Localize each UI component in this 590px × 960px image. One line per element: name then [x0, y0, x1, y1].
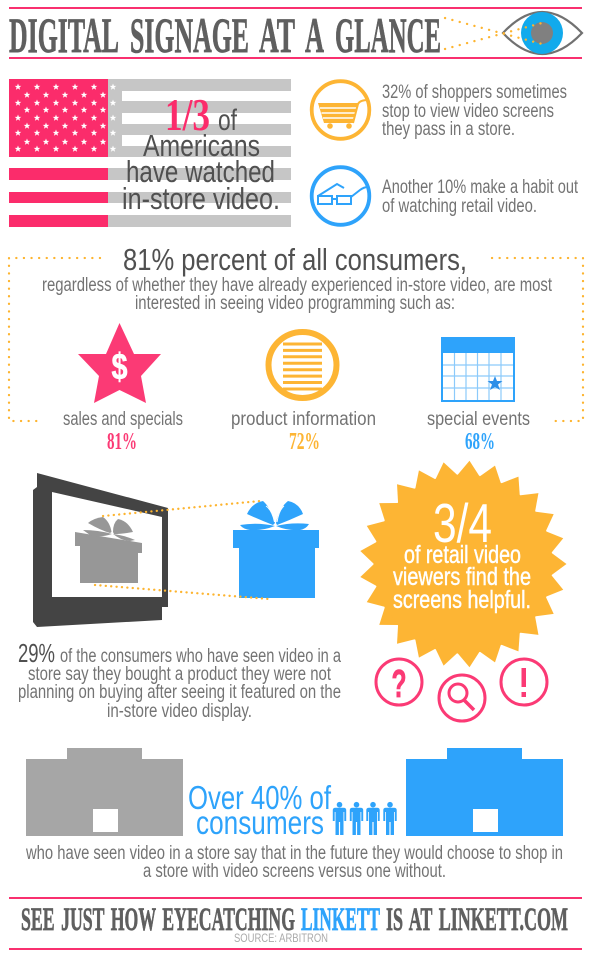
flag statistic text: Americans: [143, 128, 260, 163]
icon: shopping cart: [312, 81, 369, 139]
dotted projection lines: [95, 501, 269, 599]
badge text: [393, 541, 531, 614]
text: 29% of consumers: 29%: [18, 638, 55, 668]
text: future store choice: a store with video screens versus one without.: [143, 861, 446, 882]
label: special events 68%: special events: [427, 409, 530, 430]
panel: dotted frame programming interests: [9, 242, 583, 455]
icon: blue gift: [233, 501, 319, 598]
3/4 text: 3/4: [433, 492, 492, 554]
intro text: [42, 275, 553, 314]
icon: star with dollar sign: $: [112, 346, 128, 387]
tv screen: [52, 492, 162, 597]
label: sales and specials 81%: sales and specials: [63, 409, 183, 430]
badge text: screens helpful.: [393, 586, 531, 614]
footer rule top: [9, 897, 582, 899]
text: GLANCE: [335, 7, 441, 63]
text: 29% of consumers: [18, 638, 341, 722]
icon: four people: [333, 802, 397, 835]
heading: over 40% of consumers: consumers: [196, 804, 324, 841]
footer call to action: SEE JUST HOW EYECATCHING: [21, 902, 295, 938]
text: 32% of shoppers: [382, 82, 567, 140]
flag: [9, 79, 291, 227]
footer call to action: LINKETT: [301, 902, 380, 938]
icon: question mark circle: ?: [392, 663, 406, 706]
label: special events 68%: [427, 409, 530, 455]
text: another 10%: of watching retail video.: [382, 196, 537, 217]
icon: glasses: [312, 167, 369, 225]
flag statistic text: in-store video.: [122, 181, 280, 216]
text: future store choice: [25, 843, 563, 882]
header rule top: [9, 7, 582, 9]
footer rule bottom: [9, 948, 582, 950]
icon: star with dollar sign: [78, 323, 161, 403]
title: A: [305, 7, 324, 63]
text: 32% of shoppers: they pass in a store.: [382, 119, 515, 140]
badge: 3/4 starburst: [318, 435, 590, 710]
text: 29% of consumers: in-store video display.: [107, 701, 252, 722]
starburst: [318, 435, 590, 710]
badge text: of retail video: [404, 541, 521, 569]
flag statistic text: have watched: [126, 154, 275, 189]
label: special events 68%: 68%: [465, 429, 495, 455]
icon: calendar: [441, 337, 515, 402]
title: DIGITAL: [9, 7, 119, 63]
title: SIGNAGE: [130, 7, 249, 63]
icon: exclamation circle: [501, 659, 547, 705]
icon: gray gift: [75, 517, 142, 583]
heading: over 40% of consumers: Over 40% of: [188, 779, 332, 816]
flag statistic text: 1/3: [165, 89, 210, 140]
label: product information 72%: [231, 409, 376, 455]
icon: eye with dotted gaze: [445, 12, 582, 54]
intro text: interested in seeing video programming such as:: [135, 293, 455, 314]
icon: blue store: [406, 748, 563, 836]
dotted frame: [9, 258, 583, 421]
header rule bottom: [9, 57, 582, 59]
text: another 10%: [382, 177, 579, 217]
illustration: tv screen with gift: [33, 473, 319, 627]
heading: 81% of all consumers: 81% percent of all consumers,: [123, 242, 467, 277]
title: [9, 7, 441, 63]
label: product information 72%: product information: [231, 409, 376, 430]
badge text: viewers find the: [393, 563, 531, 591]
label: sales and specials 81%: [63, 409, 183, 455]
text: 29% of consumers: store say they bought a product they were not: [28, 664, 332, 685]
panel: habit stat with glasses: [312, 167, 579, 225]
heading: over 40% of consumers: [188, 779, 332, 841]
panel: shoppers stat with cart: [312, 81, 567, 140]
icon: magnifying glass circle: [439, 675, 485, 721]
title: AT: [259, 7, 295, 63]
text: 29% of consumers: of the consumers who have seen video in a: [60, 646, 341, 667]
label: sales and specials 81%: 81%: [107, 429, 137, 455]
tv: [33, 473, 168, 627]
text: 29% of consumers: planning on buying after seeing it featured on the: [18, 682, 341, 703]
icon: question mark circle: [376, 659, 422, 706]
flag statistic text: of: [218, 104, 237, 137]
label: product information 72%: 72%: [289, 429, 320, 455]
icon: gray store: [26, 748, 183, 836]
icon: document lines circle: [268, 332, 336, 398]
source: SOURCE: ARBITRON: [234, 933, 328, 945]
flag statistic text: [122, 89, 280, 216]
panel: american flag statistic: [9, 79, 291, 227]
